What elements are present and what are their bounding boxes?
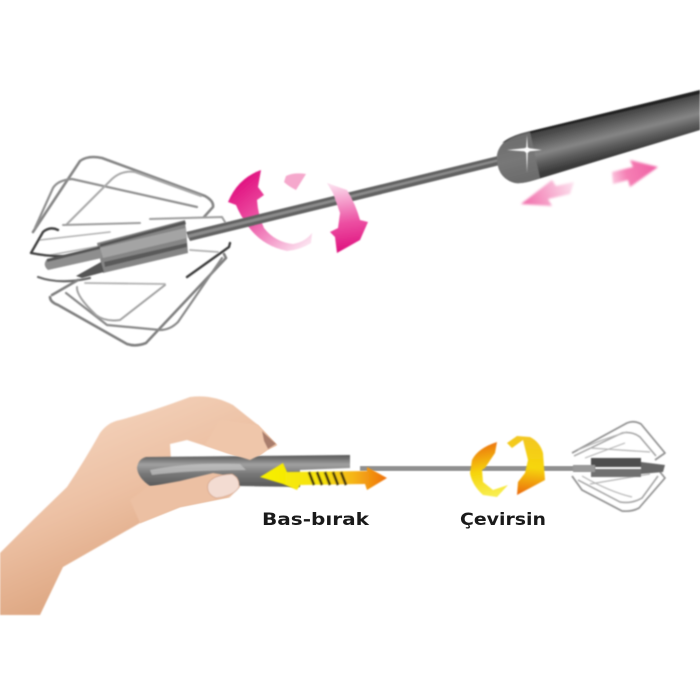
whisk hub — [45, 220, 188, 278]
coil stripes — [309, 472, 346, 485]
rotation arrow: orange left — [470, 442, 508, 497]
handle top — [497, 90, 700, 183]
bottom shaft — [360, 466, 595, 471]
rotation arrow: pink left — [228, 170, 312, 251]
slide arrow: pink left — [521, 180, 574, 206]
label: rotate: Çevirsin — [460, 510, 546, 530]
small whisk head — [572, 422, 665, 511]
fingernail: index — [262, 431, 276, 449]
hand: palm and wrist — [0, 396, 277, 615]
main shaft — [186, 156, 500, 241]
bottom handle — [137, 455, 350, 487]
rotation arrow: pink right — [327, 183, 368, 253]
top whisk head — [31, 157, 230, 345]
rotation arrow: orange right — [507, 436, 545, 495]
hand: finger and thumb over handle — [130, 420, 277, 523]
slide arrow: pink right — [612, 160, 658, 187]
label: press-release: Bas-bırak — [262, 510, 370, 530]
fingernail: thumb — [208, 474, 239, 498]
sparkle on handle — [507, 135, 542, 173]
rotation arrow: pink top fragment — [284, 173, 306, 190]
small whisk hub — [573, 458, 665, 477]
press-release arrow — [260, 463, 387, 490]
